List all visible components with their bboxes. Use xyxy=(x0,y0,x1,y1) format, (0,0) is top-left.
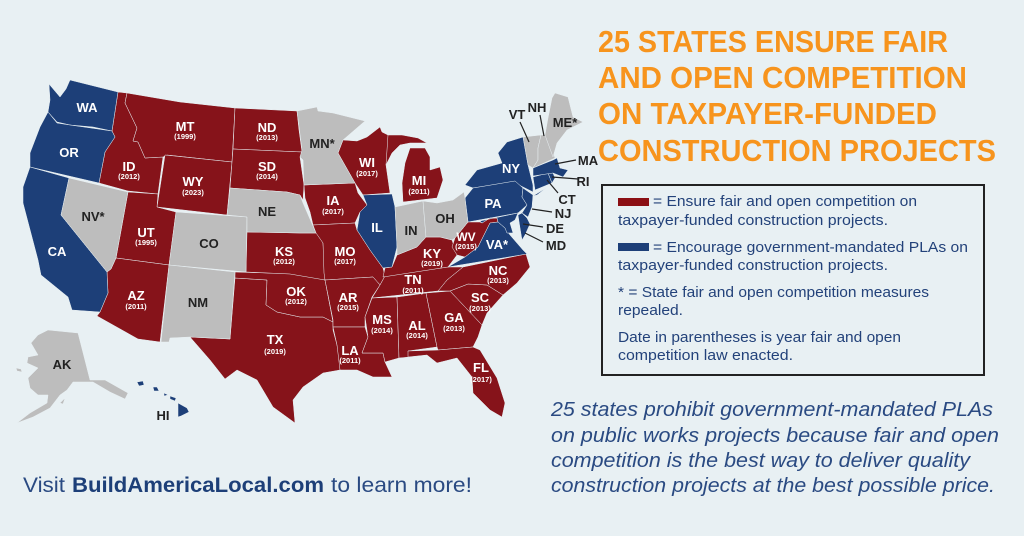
state labels: (2011) xyxy=(408,187,430,196)
text block: website call to action xyxy=(23,474,472,497)
state labels: (1995) xyxy=(135,238,157,247)
state labels: (2023) xyxy=(182,188,204,197)
state labels: SD xyxy=(258,159,276,174)
state labels: (2017) xyxy=(322,207,344,216)
state labels: AL xyxy=(408,318,426,333)
state labels: WV xyxy=(456,230,476,244)
state labels: FL xyxy=(473,360,489,375)
state labels: (2015) xyxy=(337,303,359,312)
panel: legend: = Ensure fair and open competition on xyxy=(653,193,917,210)
state labels: VA* xyxy=(486,237,509,252)
state: Kansas xyxy=(246,232,325,280)
state: Arizona xyxy=(97,258,169,342)
state: California xyxy=(23,167,108,312)
state labels: (2013) xyxy=(443,324,465,333)
state: Missouri xyxy=(313,223,385,285)
state: South Carolina xyxy=(450,284,503,325)
state labels: CA xyxy=(48,244,67,259)
state labels: WI xyxy=(359,155,375,170)
state labels: (2011) xyxy=(125,302,147,311)
state: Maine xyxy=(545,93,583,157)
state: Virginia xyxy=(448,222,527,267)
state labels: (2017) xyxy=(356,169,378,178)
title xyxy=(598,24,996,168)
state: Florida xyxy=(408,347,505,417)
state: Alabama xyxy=(397,293,437,358)
legend swatch: red xyxy=(618,198,649,206)
state labels: UT xyxy=(137,225,155,240)
state labels: WA xyxy=(77,100,98,115)
state labels: AK xyxy=(53,357,72,372)
state: Michigan xyxy=(386,135,443,202)
state: Washington xyxy=(48,80,118,131)
state: Montana xyxy=(125,93,235,162)
state labels: LA xyxy=(341,343,359,358)
state labels: HI xyxy=(156,408,170,423)
state labels: (2013) xyxy=(469,304,491,313)
state labels: (2019) xyxy=(421,259,443,268)
state: Idaho xyxy=(99,92,163,194)
state: Oregon xyxy=(30,112,115,183)
state: Oklahoma xyxy=(235,272,333,322)
state labels: NJ xyxy=(555,206,571,221)
map: United States xyxy=(16,80,599,423)
title: 25 STATES ENSURE FAIR xyxy=(598,24,948,59)
state labels: (2012) xyxy=(118,172,140,181)
state labels: IN xyxy=(404,223,418,238)
state labels: NM xyxy=(188,295,208,310)
state: Massachusetts xyxy=(533,158,568,177)
title: ON TAXPAYER-FUNDED xyxy=(598,96,937,131)
state labels: NE xyxy=(258,204,276,219)
state labels: MD xyxy=(546,238,566,253)
state labels: (2011) xyxy=(402,286,424,295)
state: Ohio xyxy=(423,192,468,240)
panel: legend xyxy=(602,185,984,375)
text block: website call to action: Visit xyxy=(23,474,65,497)
state: Tennessee xyxy=(372,267,463,298)
state: Louisiana xyxy=(333,327,392,377)
state: Alaska xyxy=(16,330,128,423)
state: Minnesota xyxy=(297,107,365,185)
state labels: IA xyxy=(326,193,340,208)
panel: legend: competition law enacted. xyxy=(618,347,793,364)
state labels: TN xyxy=(404,272,422,287)
state labels: MO xyxy=(335,244,355,259)
state: New Jersey xyxy=(522,188,533,217)
state: Colorado xyxy=(169,212,247,272)
state: Kentucky xyxy=(383,237,457,277)
state labels: ND xyxy=(258,120,276,135)
state: Connecticut xyxy=(533,173,552,190)
state: Vermont xyxy=(523,135,541,168)
state labels: TX xyxy=(267,332,284,347)
state: Maryland xyxy=(480,213,518,233)
state labels: AZ xyxy=(127,288,145,303)
panel: legend: taxpayer-funded construction projects. xyxy=(618,257,888,274)
state labels: (2017) xyxy=(334,257,356,266)
state labels: GA xyxy=(444,310,464,325)
text block: prohibition statement: construction projects at the best possible price. xyxy=(551,475,995,497)
state: Pennsylvania xyxy=(465,181,527,222)
state labels: (2014) xyxy=(371,326,393,335)
state: North Carolina xyxy=(438,254,530,295)
state labels: MI xyxy=(412,173,426,188)
legend swatch: blue xyxy=(618,243,649,251)
panel: legend: = Encourage government-mandated PLAs on xyxy=(653,239,968,256)
state labels: VT xyxy=(509,107,525,122)
state: West Virginia xyxy=(452,218,498,257)
text block: prohibition statement: 25 states prohibit government-mandated PLAs xyxy=(550,399,993,421)
state: Arkansas xyxy=(325,277,380,327)
state: Hawaii xyxy=(137,381,189,417)
state labels: (1999) xyxy=(174,132,196,141)
state: Indiana xyxy=(395,201,426,255)
panel: legend: repealed. xyxy=(618,302,683,319)
state labels: (2013) xyxy=(256,133,278,142)
states: fair and open competition (red) xyxy=(97,92,530,423)
state: Delaware and eastern shore xyxy=(518,213,530,240)
state labels: (2012) xyxy=(285,297,307,306)
state: Nevada xyxy=(61,178,128,272)
state labels: CT xyxy=(558,192,576,207)
state: South Dakota xyxy=(230,149,304,200)
text block: prohibition statement: competition is the best way to deliver quality xyxy=(551,450,971,472)
state labels: CO xyxy=(199,236,219,251)
state labels: PA xyxy=(484,196,502,211)
panel: legend: taxpayer-funded construction projects. xyxy=(618,212,888,229)
state labels: KS xyxy=(275,244,293,259)
state labels: AR xyxy=(339,290,358,305)
state: Wisconsin xyxy=(338,127,392,195)
state labels xyxy=(48,100,599,423)
state: Iowa xyxy=(304,183,367,225)
state labels: ME* xyxy=(553,115,578,130)
text block: prohibition statement xyxy=(550,399,999,497)
state: Texas xyxy=(190,278,340,423)
state labels: RI xyxy=(576,174,590,189)
state labels: NY xyxy=(502,161,520,176)
panel: legend: * = State fair and open competition measures xyxy=(618,284,929,301)
state labels: MT xyxy=(176,119,194,134)
state labels: (2019) xyxy=(264,347,286,356)
state: Georgia xyxy=(426,291,482,350)
state labels: (2014) xyxy=(256,172,278,181)
state: Rhode Island xyxy=(548,173,555,183)
state labels: NV* xyxy=(81,209,105,224)
state labels: (2013) xyxy=(487,276,509,285)
state labels: (2012) xyxy=(273,257,295,266)
state labels: OK xyxy=(286,284,306,299)
state labels: MA xyxy=(578,153,599,168)
state labels: MS xyxy=(372,312,392,327)
states: government-mandated PLAs (blue) xyxy=(23,80,568,417)
state: Illinois xyxy=(357,194,397,268)
state labels: NH xyxy=(528,100,546,115)
text block: website call to action: BuildAmericaLocal.com xyxy=(72,474,324,497)
state: New Mexico xyxy=(161,265,235,342)
state labels: OR xyxy=(59,145,79,160)
state labels: IL xyxy=(371,220,383,235)
state labels: SC xyxy=(471,290,490,305)
state: New York xyxy=(465,137,546,196)
state labels: WY xyxy=(183,174,204,189)
state: Nebraska xyxy=(227,188,316,233)
states: neutral (gray) xyxy=(16,93,583,423)
state labels: (2011) xyxy=(339,356,361,365)
title: AND OPEN COMPETITION xyxy=(598,60,967,95)
text block: website call to action: to learn more! xyxy=(331,474,472,497)
state labels: ID xyxy=(122,159,136,174)
state: New Hampshire xyxy=(533,135,555,168)
state labels: OH xyxy=(435,211,455,226)
state: Mississippi xyxy=(362,297,399,362)
callout lines for small states xyxy=(520,115,578,242)
state labels: MN* xyxy=(309,136,336,151)
text block: prohibition statement: on public works projects because fair and open xyxy=(551,425,999,447)
state labels: NC xyxy=(489,263,508,278)
state: North Dakota xyxy=(233,108,302,152)
panel: legend: Date in parentheses is year fair and open xyxy=(618,329,901,346)
state labels: (2015) xyxy=(455,242,477,251)
state labels: KY xyxy=(423,246,441,261)
state labels: DE xyxy=(546,221,564,236)
state labels: (2017) xyxy=(470,375,492,384)
title: CONSTRUCTION PROJECTS xyxy=(598,133,996,168)
state: Wyoming xyxy=(157,155,232,215)
state labels: (2014) xyxy=(406,331,428,340)
state: Utah xyxy=(116,192,176,265)
